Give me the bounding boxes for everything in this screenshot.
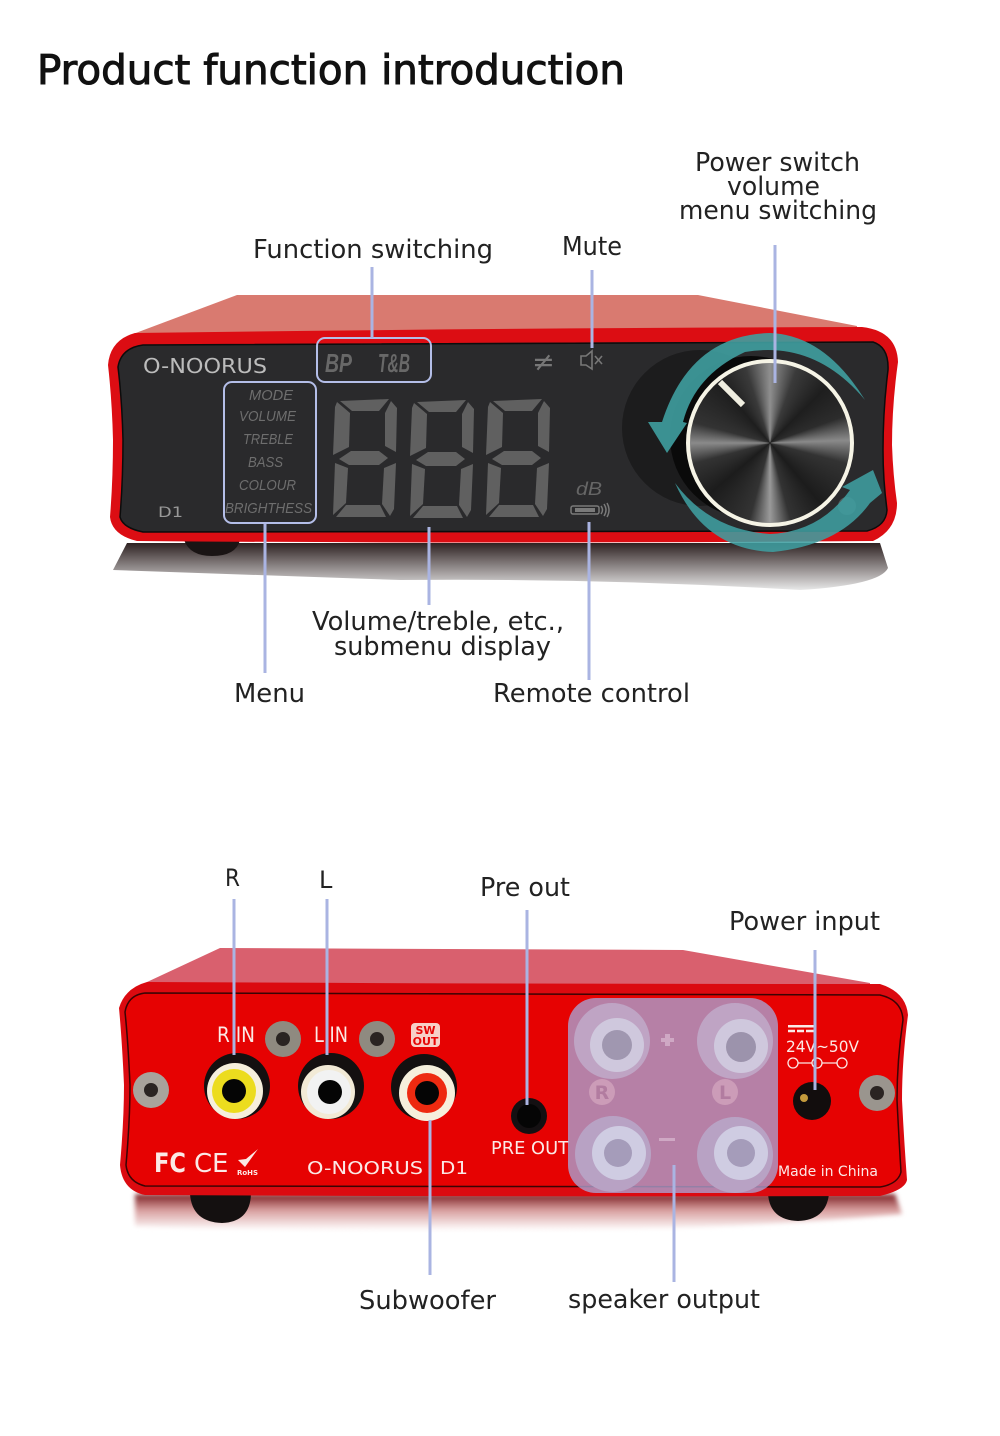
ghost mark [838, 497, 856, 515]
model mark: D1 [158, 505, 183, 521]
label: R: R [225, 864, 240, 892]
polarity marks [659, 1034, 675, 1141]
label: mute: Mute [562, 232, 622, 262]
not-equal indicator: ≠ [532, 347, 555, 378]
channel mark L: L [719, 1082, 731, 1104]
screw left [133, 1072, 169, 1108]
binding post R plus [574, 1003, 650, 1079]
input labels: R IN [217, 1023, 255, 1047]
label: submenu display [312, 607, 564, 662]
teal arrow: counter-clockwise [648, 333, 865, 453]
RCA jack L white [298, 1053, 364, 1119]
menu items: BASS [248, 454, 283, 471]
label: subwoofer: Subwoofer [359, 1286, 496, 1316]
DC voltage marking: 24V~50V [786, 1037, 859, 1056]
title: Product function introduction [37, 46, 625, 94]
speaker output overlay [568, 998, 778, 1193]
screw upper 2 [359, 1021, 395, 1057]
menu items: VOLUME [239, 408, 297, 425]
RCA jack R yellow [204, 1053, 270, 1119]
menu items: MODE [249, 387, 294, 404]
label: power switch [679, 148, 877, 226]
knob face [686, 359, 854, 527]
SW OUT badge: SW [415, 1024, 436, 1037]
rear right foot [768, 1194, 829, 1221]
certification marks: FC [154, 1148, 186, 1179]
seven segment display [333, 399, 550, 518]
rear logo: O-NOORUS [307, 1158, 423, 1179]
channel mark R [589, 1079, 615, 1105]
label: power switch: volume [727, 172, 820, 202]
leader lines: front [265, 245, 775, 680]
SW OUT badge [411, 1023, 440, 1048]
input labels [217, 1023, 348, 1047]
knob pointer [720, 382, 743, 405]
binding post L plus [697, 1003, 773, 1079]
PRE OUT label: PRE OUT [491, 1138, 570, 1159]
certification marks [154, 1148, 258, 1179]
dB indicator: dB [576, 479, 602, 499]
function indicators [325, 348, 410, 378]
SW OUT badge: OUT [413, 1035, 439, 1048]
front top panel [133, 295, 857, 340]
front shadow [113, 543, 888, 590]
rear red body [119, 982, 908, 1196]
power jack [793, 1082, 831, 1120]
function indicators: T&B [378, 348, 410, 378]
menu items: COLOUR [239, 477, 296, 494]
certification marks: E [212, 1149, 228, 1179]
rear shadow [135, 1194, 902, 1230]
channel mark L [712, 1079, 738, 1105]
screw upper 1 [265, 1021, 301, 1057]
rear logo: D1 [440, 1158, 468, 1179]
certification marks: C [194, 1149, 212, 1179]
certification marks: RoHS [237, 1169, 258, 1177]
function indicators: BP [325, 348, 352, 378]
menu items [225, 387, 312, 517]
label: menu: Menu [234, 679, 305, 709]
pre out jack [511, 1098, 547, 1134]
knob side [670, 356, 832, 518]
binding post R minus [575, 1116, 651, 1192]
rear logo [307, 1158, 468, 1179]
label: submenu display: submenu display [334, 632, 551, 662]
label: power switch: menu switching [679, 196, 877, 226]
knob recess [622, 350, 778, 506]
rear view amplifier [119, 948, 908, 1230]
brand logo: O-NOORUS [143, 354, 267, 378]
label: function switching: Function switching [253, 235, 493, 265]
rear inner panel [125, 993, 903, 1187]
label: power input: Power input [729, 907, 880, 937]
screw right [859, 1075, 895, 1111]
label: L: L [319, 866, 333, 894]
menu items: TREBLE [243, 431, 294, 448]
label: remote control: Remote control [493, 679, 690, 709]
teal arrow: clockwise [675, 470, 882, 552]
icon: mute [581, 351, 602, 369]
label: speaker output: speaker output [568, 1285, 760, 1315]
icon: remote battery [571, 503, 609, 517]
rear left foot [190, 1194, 251, 1223]
label: submenu display: Volume/treble, etc., [312, 607, 564, 637]
front display panel [118, 342, 888, 532]
rear top panel [147, 948, 870, 990]
front red body [108, 327, 898, 542]
binding post L minus [697, 1117, 773, 1193]
menu items: BRIGHTHESS [225, 500, 312, 517]
DC voltage marking [786, 1025, 859, 1068]
Made in China label: Made in China [778, 1164, 878, 1180]
function switching box [317, 338, 431, 382]
front foot [184, 540, 240, 556]
RCA jack subwoofer red [391, 1054, 457, 1121]
leader lines: rear [234, 899, 815, 1282]
front view amplifier [108, 295, 898, 590]
channel mark R: R [595, 1082, 610, 1104]
input labels: L IN [314, 1023, 348, 1047]
menu box [224, 382, 316, 523]
label: pre out: Pre out [480, 873, 570, 903]
label: power switch: Power switch [695, 148, 860, 178]
